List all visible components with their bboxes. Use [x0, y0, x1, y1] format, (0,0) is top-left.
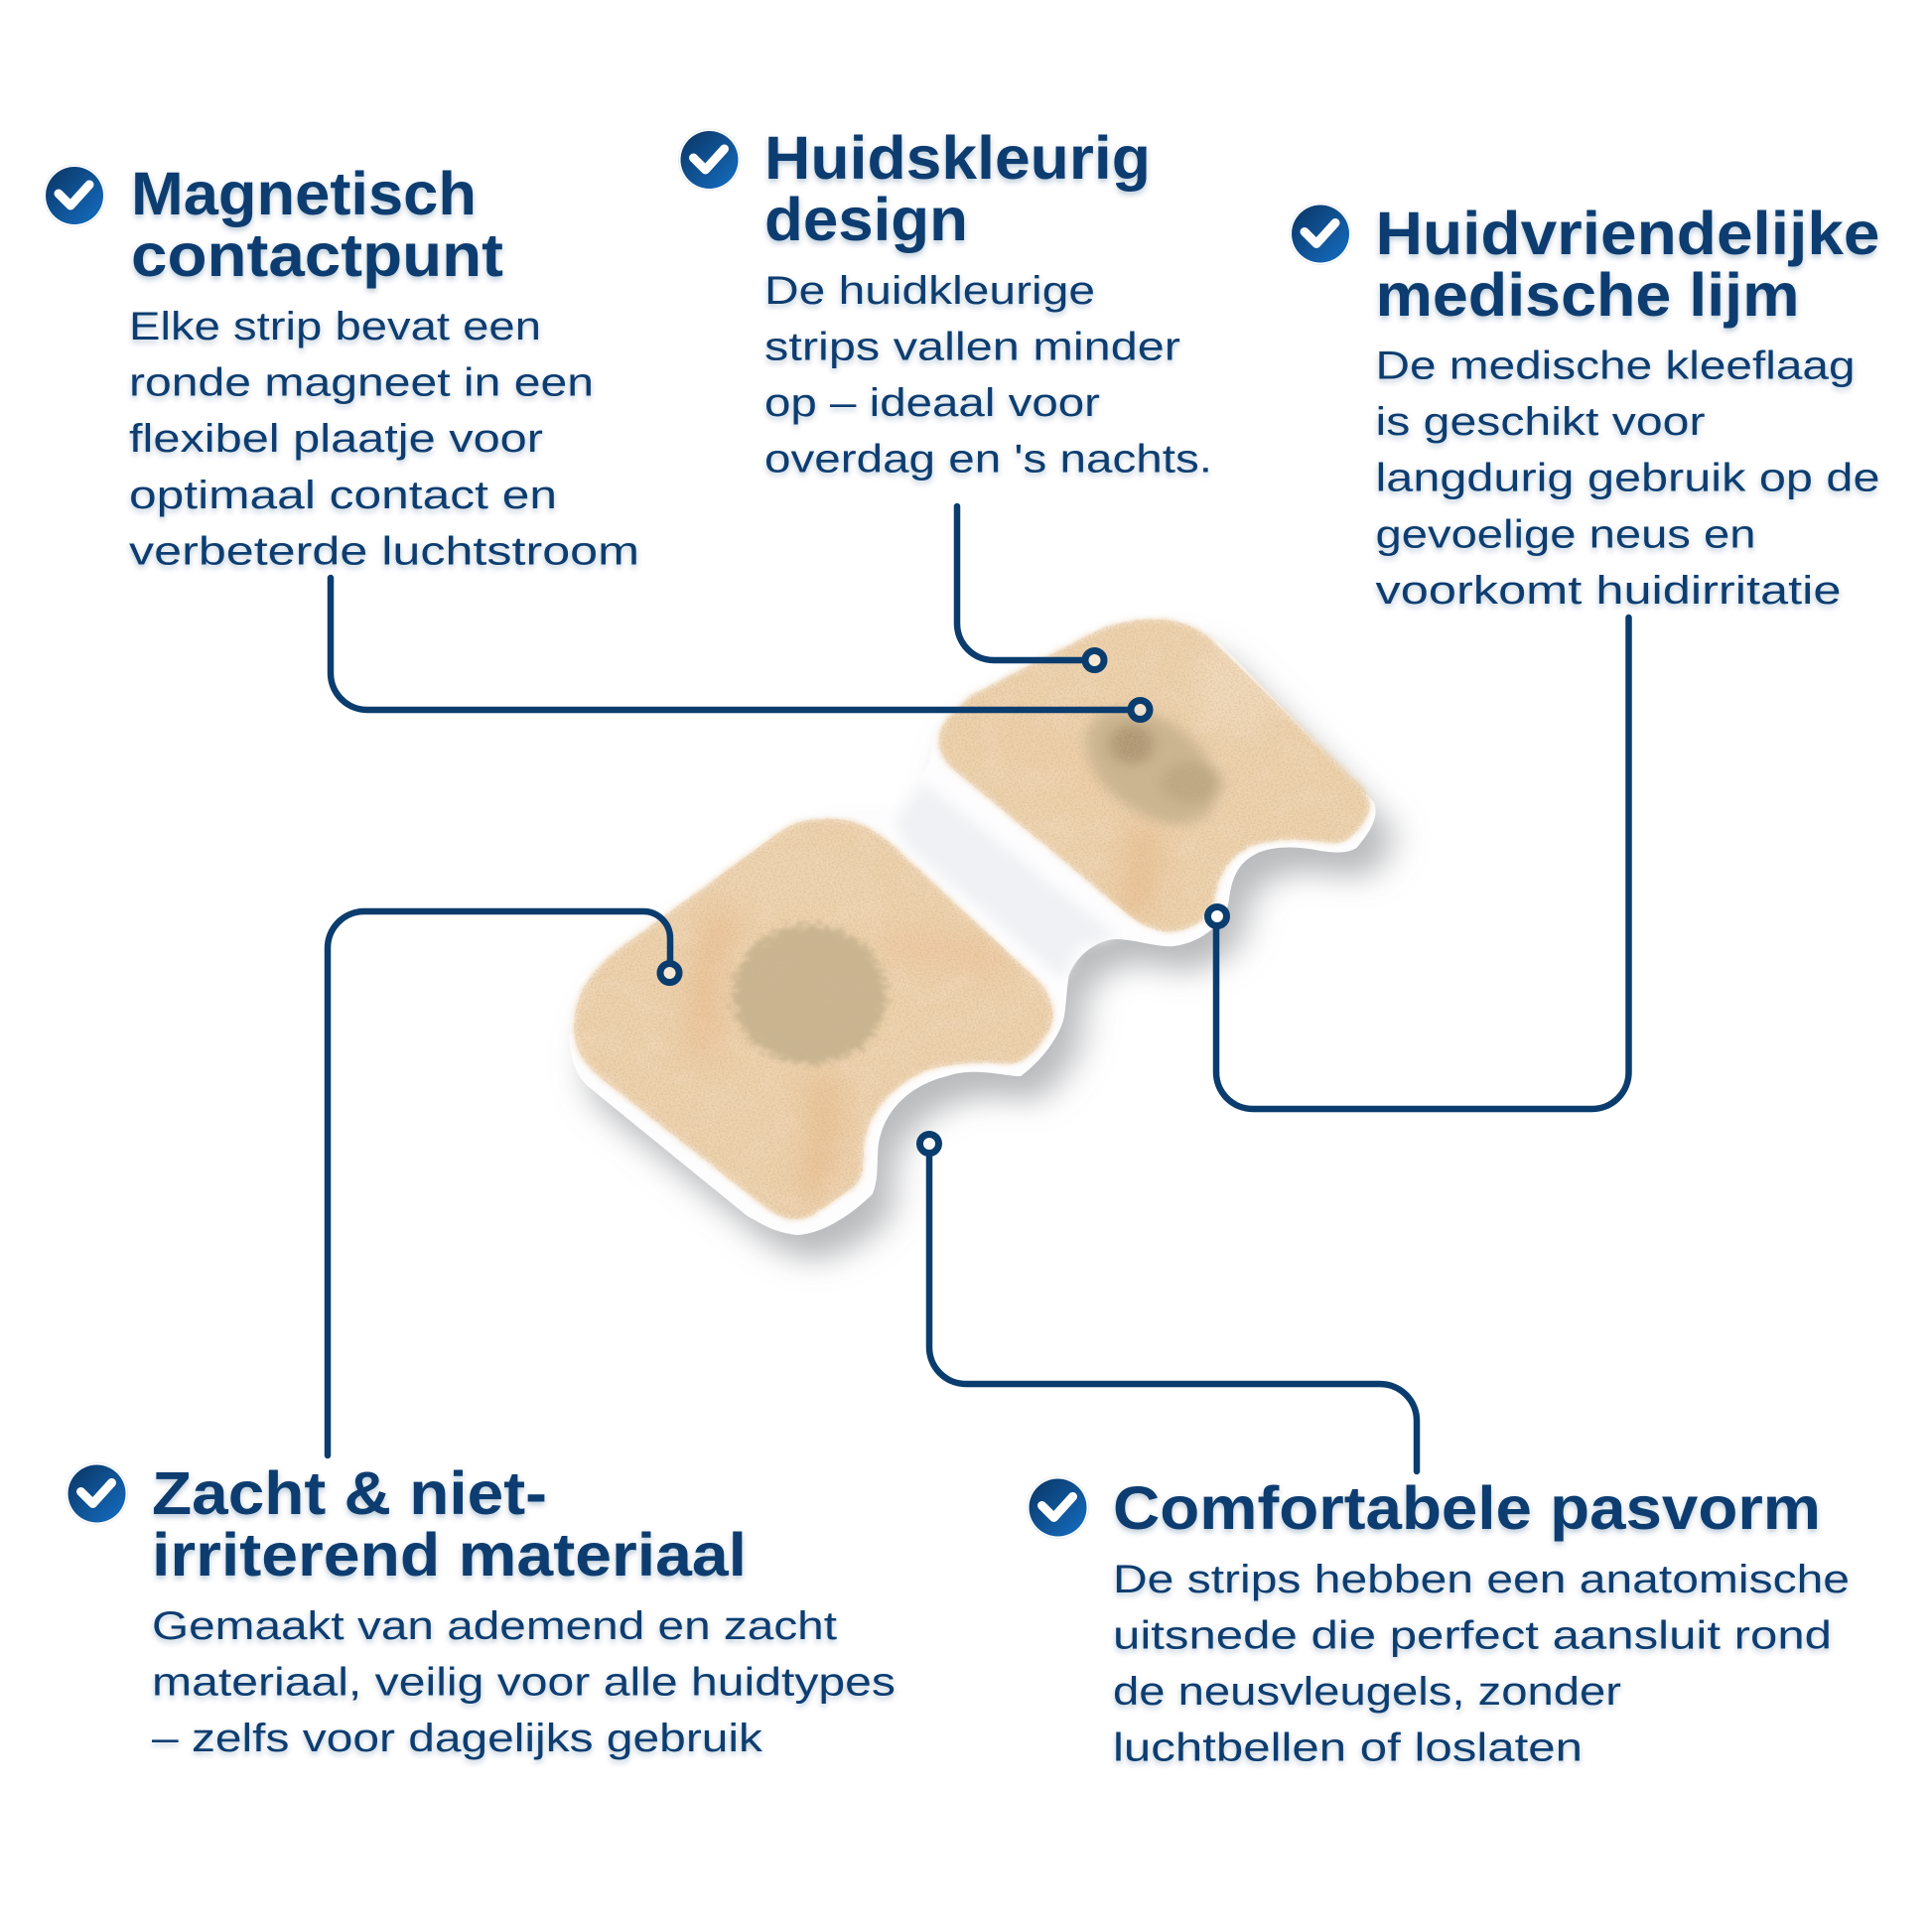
icon: check badge: [1027, 1477, 1088, 1539]
heading: Magnetisch: [131, 160, 477, 227]
icon: check badge: [679, 129, 741, 191]
icon: check badge: [66, 1463, 127, 1525]
heading: design: [764, 186, 968, 253]
heading: [131, 160, 503, 289]
body text: op – ideaal voor: [764, 381, 1100, 425]
body text: [764, 269, 1212, 481]
magnet disc: upper pad: [1082, 705, 1227, 828]
heading: contactpunt: [131, 221, 503, 289]
connector: comfortable fit: [919, 1134, 1417, 1471]
icon: check badge: [44, 165, 105, 226]
connector: soft material: [328, 911, 679, 1455]
heading: [152, 1459, 747, 1588]
body text: gevoelige neus en: [1376, 512, 1755, 556]
panel: Comfortabele pasvorm: [1027, 1474, 1850, 1769]
body text: [1113, 1558, 1850, 1769]
body text: flexibel plaatje voor: [129, 417, 543, 461]
heading: Huidskleurig: [764, 124, 1151, 192]
connector: medical adhesive: [1207, 618, 1628, 1109]
heading: Huidvriendelijke: [1376, 200, 1880, 267]
body text: ronde magneet in een: [129, 361, 594, 405]
body text: De medische kleeflaag: [1376, 344, 1855, 387]
icon: check badge: [1290, 203, 1351, 264]
body text: strips vallen minder: [764, 326, 1180, 369]
body text: De huidkleurige: [764, 269, 1095, 313]
body text: Gemaakt van ademend en zacht: [152, 1604, 837, 1648]
body text: voorkomt huidirritatie: [1376, 569, 1841, 613]
heading: [764, 124, 1151, 253]
body text: uitsnede die perfect aansluit rond: [1113, 1614, 1832, 1658]
magnet disc: lower pad: [733, 924, 887, 1064]
heading: Comfortabele pasvorm: [1113, 1474, 1821, 1542]
body text: verbeterde luchtstroom: [129, 530, 639, 574]
panel: Magnetisch contactpunt: [44, 160, 639, 574]
panel: Zacht en niet-irriterend materiaal: [66, 1459, 896, 1760]
body text: langdurig gebruik op de: [1376, 457, 1880, 500]
connector: magnetic contact point: [331, 578, 1150, 719]
body text: [152, 1604, 896, 1760]
heading: Zacht & niet-: [152, 1459, 547, 1527]
body text: overdag en 's nachts.: [764, 437, 1212, 481]
body text: De strips hebben een anatomische: [1113, 1558, 1850, 1601]
panel: Huidvriendelijke medische lijm: [1290, 200, 1880, 613]
body text: de neusvleugels, zonder: [1113, 1670, 1621, 1714]
heading: [1376, 200, 1880, 329]
body text: [129, 305, 639, 574]
body text: [1376, 344, 1880, 613]
product image: magnetic nose strip: [536, 576, 1393, 1260]
connector: skin coloured design: [957, 506, 1104, 669]
body text: Elke strip bevat een: [129, 305, 541, 348]
body text: optimaal contact en: [129, 474, 557, 517]
body text: – zelfs voor dagelijks gebruik: [152, 1717, 763, 1760]
body text: luchtbellen of loslaten: [1113, 1725, 1583, 1769]
heading: irriterend materiaal: [152, 1521, 747, 1588]
panel: Huidskleurig design: [679, 124, 1212, 481]
heading: medische lijm: [1376, 261, 1799, 329]
body text: is geschikt voor: [1376, 400, 1706, 444]
body text: materiaal, veilig voor alle huidtypes: [152, 1660, 896, 1704]
